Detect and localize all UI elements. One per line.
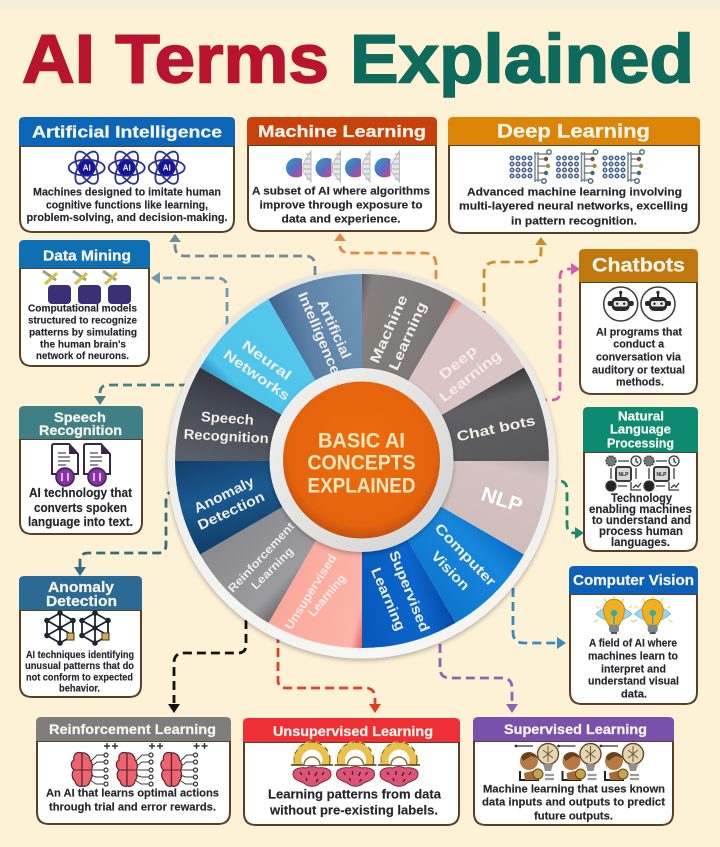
heading: Data Mining: Data Mining [43, 248, 131, 264]
wheel segment labels: Vision [428, 548, 473, 593]
wheel segment labels: Unsupervised [282, 552, 339, 632]
description: machines learn to [588, 650, 678, 662]
description: cognitive functions like learning, [46, 200, 208, 212]
connector arrow: Artificial Intelligence [169, 234, 315, 275]
description: Computational models [28, 304, 137, 314]
wheel: basic AI concepts [168, 268, 556, 658]
description: A subset of AI where algorithms [252, 186, 430, 198]
connector arrow: Deep Learning [484, 237, 547, 320]
wheel segment labels: Recognition [183, 426, 269, 446]
connector arrow: NLP [547, 481, 584, 539]
description: patterns by simulating [29, 328, 137, 338]
icon: anomaly networks [44, 610, 111, 646]
description: in pattern recognition. [511, 216, 637, 228]
panel: Reinforcement Learning [36, 717, 231, 824]
connector arrow: Machine Learning [334, 233, 436, 293]
wheel segment labels: Chat bots [455, 412, 537, 444]
panel: Unsupervised Learning [243, 718, 460, 825]
description: to understand and [592, 513, 691, 527]
panel: Chatbots [579, 249, 698, 394]
description [588, 638, 679, 700]
icon: data mining cylinders [43, 271, 131, 304]
heading: Reinforcement Learning: Reinforcement Learning [49, 721, 216, 737]
heading: Natural Language Processing: Processing [607, 436, 674, 450]
description [28, 304, 137, 362]
wheel segment labels: Intelligence [295, 289, 344, 377]
description [25, 650, 134, 694]
description: future outputs. [534, 810, 613, 822]
description: AI technology that [29, 486, 133, 500]
wheel segment labels: Computer [432, 520, 500, 590]
description: language into text. [28, 515, 133, 529]
description: A field of AI where [589, 638, 677, 650]
heading: Anomaly Detection [46, 580, 117, 610]
wheel segment labels: Detection [195, 488, 267, 533]
wheel segment labels: Learning [305, 571, 349, 619]
heading: Deep Learning: Deep Learning [497, 122, 650, 142]
heading: Anomaly Detection: Detection [46, 594, 117, 610]
icon: AI atoms: AI [83, 164, 91, 172]
description: languages. [611, 535, 670, 549]
heading: Speech Recognition [39, 409, 122, 438]
heading: Supervised Learning: Supervised Learning [504, 721, 647, 737]
description: Learning patterns from data [268, 788, 442, 802]
description: without pre-existing labels. [269, 804, 438, 818]
description: understand visual [588, 676, 679, 688]
icon: gears over brains [291, 742, 420, 786]
description: methods. [616, 376, 664, 388]
heading: Chatbots: Chatbots [592, 256, 685, 276]
description: Machines designed to imitate human [33, 186, 221, 198]
connector arrow: Supervised Learning [440, 630, 518, 713]
description: Technology [611, 491, 672, 505]
description: AI techniques identifying [26, 650, 134, 661]
description: process human [599, 524, 683, 538]
heading: Speech Recognition: Recognition [39, 422, 122, 438]
icon: eye and bulb [594, 596, 673, 634]
panel: Speech Recognition [19, 406, 143, 534]
panel: Natural Language Processing [583, 407, 698, 551]
wheel segment labels: Learning [368, 565, 409, 633]
wheel center text: CONCEPTS [308, 452, 416, 474]
wheel segment labels: Speech [200, 408, 254, 428]
panel: Supervised Learning [473, 717, 674, 825]
icon: NLP chips [606, 456, 679, 491]
icon: layered neural networks [510, 150, 644, 183]
description: data. [621, 688, 647, 700]
wheel segment labels: Neural [239, 337, 295, 383]
panel: Artificial Intelligence [19, 117, 235, 232]
icon: AI atoms: AI [163, 164, 171, 172]
description [459, 186, 688, 228]
wheel segment labels [183, 289, 537, 634]
description [28, 486, 133, 529]
heading: Natural Language Processing [607, 408, 674, 450]
panel: Anomaly Detection [19, 576, 142, 697]
wheel segment labels: Learning [436, 347, 504, 405]
description [46, 788, 219, 814]
description: data inputs and outputs to predict [482, 796, 665, 808]
description: conversation via [596, 352, 682, 364]
description: structured to recognize [28, 316, 137, 326]
description [592, 326, 685, 388]
description: problem-solving, and decision-making. [26, 212, 228, 224]
icon: robot faces [604, 287, 675, 321]
icon: NLP chips: NLP [618, 472, 629, 478]
wheel center text: BASIC AI [318, 430, 405, 452]
description: Machine learning that uses known [483, 784, 665, 796]
wheel inner ring [270, 368, 454, 552]
connector arrow: Unsupervised Learning [278, 620, 381, 713]
heading: Computer Vision: Computer Vision [573, 572, 694, 589]
description: improve through exposure to [260, 200, 423, 212]
wheel segment labels: Machine [366, 292, 411, 366]
wheel segment labels: Reinforcement [226, 520, 297, 595]
description: interpret and [601, 664, 666, 676]
description [482, 784, 665, 822]
description: AI programs that [596, 326, 682, 338]
wheel segments [169, 268, 555, 654]
description [589, 491, 692, 549]
wheel segment labels: Deep [436, 342, 480, 382]
heading: Unsupervised Learning: Unsupervised Learning [273, 723, 433, 739]
title: Explained [350, 20, 694, 98]
icon: NLP chips: NLP [656, 472, 667, 478]
description: An AI that learns optimal actions [46, 788, 219, 800]
wheel segment labels: Artificial [314, 297, 355, 361]
panel: Deep Learning [448, 117, 700, 233]
icon: person with bulb [515, 744, 644, 780]
description: multi-layered neural networks, excelling [459, 200, 688, 212]
wheel segment labels: Learning [250, 546, 296, 592]
heading: Machine Learning: Machine Learning [258, 122, 426, 141]
description: converts spoken [34, 501, 127, 515]
description [252, 186, 430, 226]
description: enabling machines [589, 502, 692, 516]
wheel segment labels: Learning [385, 299, 430, 373]
panel: Data Mining [19, 240, 150, 366]
description: conduct a [613, 338, 665, 350]
icon: speech documents [52, 444, 110, 486]
description: data and experience. [282, 214, 400, 226]
wheel segment labels: NLP [478, 483, 525, 517]
title [22, 20, 694, 98]
connector arrow: Anomaly Detection [74, 491, 176, 576]
description: network of neurons. [36, 351, 129, 362]
description: auditory or textual [592, 364, 685, 376]
wheel segment labels: Networks [221, 346, 293, 404]
connector arrow: Speech Recognition [94, 385, 188, 405]
description: not conform to expected [26, 672, 133, 684]
description: unusual patterns that do [25, 661, 134, 672]
heading: Natural Language Processing: Natural [618, 408, 664, 424]
wheel segment labels: Anomaly [191, 473, 257, 516]
heading: Anomaly Detection: Anomaly [48, 580, 114, 596]
connector arrow: Computer Vision [513, 574, 566, 649]
heading: Speech Recognition: Speech [54, 409, 106, 425]
title: AI Terms [22, 20, 329, 98]
connector arrow: Reinforcement Learning [168, 606, 246, 713]
wheel center text [308, 430, 416, 498]
description [268, 788, 442, 818]
heading: Artificial Intelligence: Artificial Intelligence [32, 122, 222, 142]
connector arrow: Neural Networks to Data Mining [151, 272, 227, 325]
icon: brain networks [286, 151, 400, 182]
description: Advanced machine learning involving [467, 186, 682, 198]
description: the human brain's [40, 340, 126, 350]
wheel center text: EXPLAINED [308, 474, 416, 498]
panel: Computer Vision [569, 566, 698, 704]
description: through trial and error rewards. [49, 802, 216, 814]
panel: Machine Learning [247, 117, 437, 231]
wheel center button [283, 382, 440, 538]
icon: AI atoms: AI [123, 164, 131, 172]
description [26, 186, 228, 224]
wheel outer ring [168, 270, 556, 658]
heading: Natural Language Processing: Language [610, 422, 671, 436]
wheel segment labels: Supervised [386, 548, 433, 634]
icon: AI atoms [69, 148, 185, 187]
description: behavior. [59, 684, 100, 694]
connector arrow: Chatbots [538, 263, 580, 400]
icon: brains with outputs [71, 743, 208, 786]
